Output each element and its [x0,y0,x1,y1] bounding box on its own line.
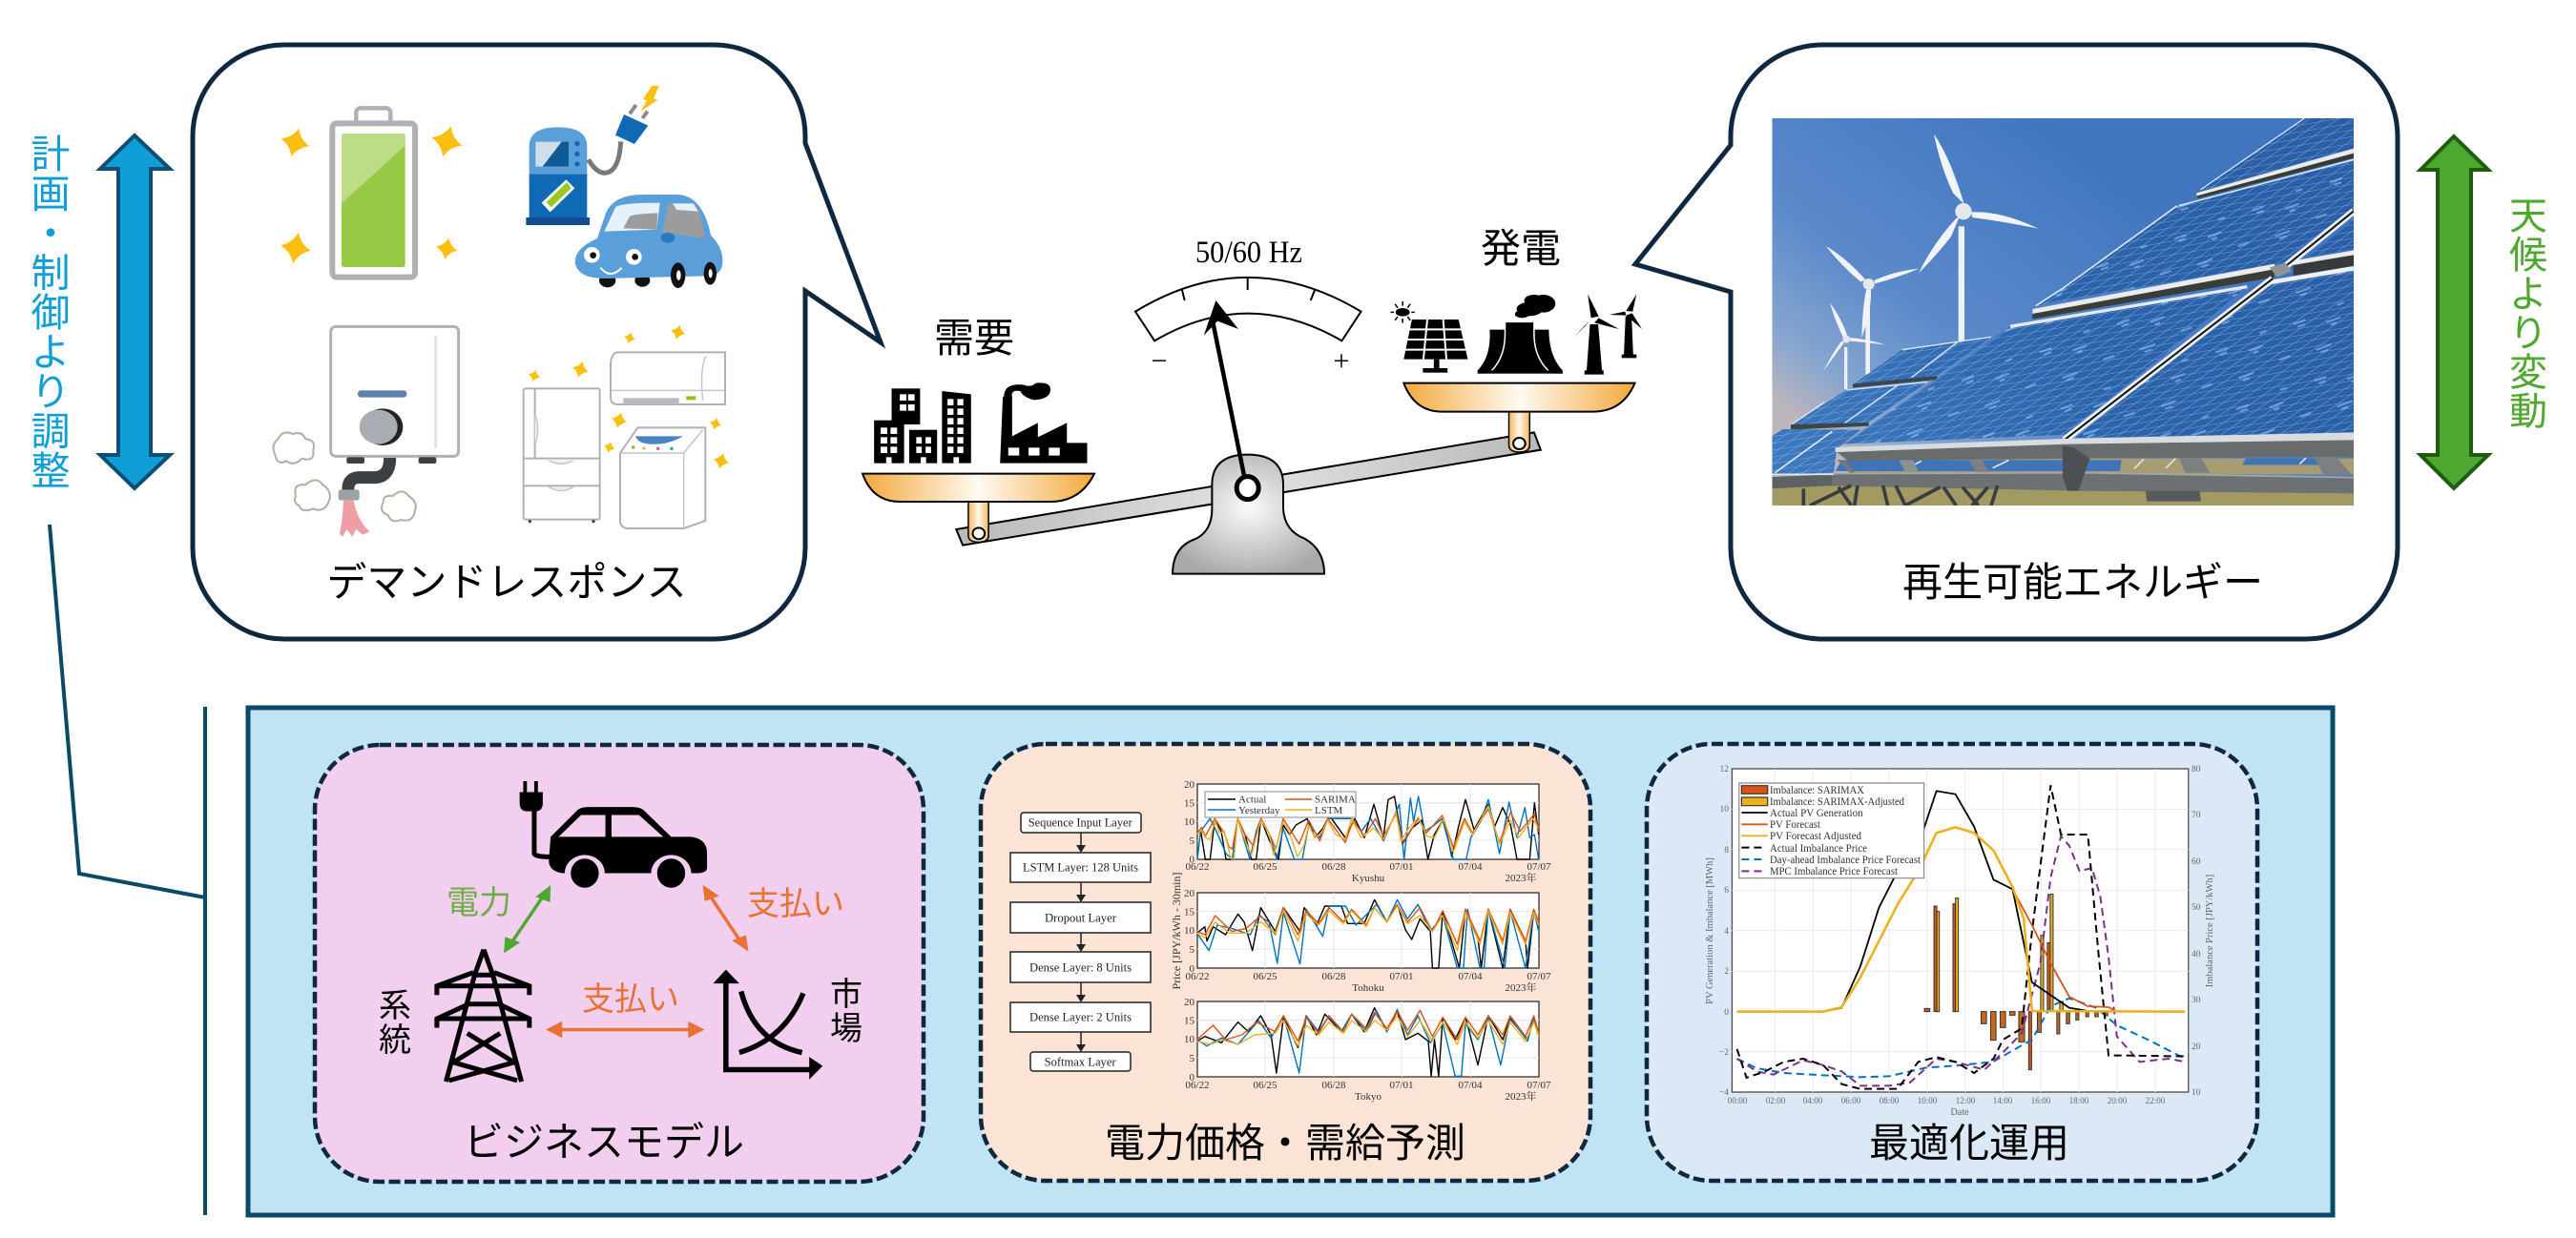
gauge plus sign: + [1334,345,1349,377]
icon: power plant with cooling towers [1478,295,1563,374]
icon: electric car with plug [520,781,707,892]
series: PV forecast adjusted [1737,827,2185,1012]
chart legend box [1739,783,1924,878]
card title: optimal operation: 最適化運用 [1869,1121,2069,1166]
chart axis labels: 00:00 [1728,1096,1748,1105]
chart axis labels: 14:00 [1993,1096,2013,1105]
chart: Kyushu price: 07/01 [1389,861,1414,873]
chart: Kyushu price: 2023年 [1506,871,1536,884]
icon: water heater [273,326,459,537]
chart legend labels: PV Forecast Adjusted [1770,829,1861,842]
chart axis labels: 12:00 [1956,1096,1976,1105]
chart axis labels: 12 [1719,765,1729,774]
icon: EV charging station [526,86,659,225]
label: generation: 発電 [1481,226,1561,271]
chart: Tohoku price: Tohoku [1352,982,1384,994]
icon: battery [278,108,467,278]
chart axis labels: 04:00 [1803,1096,1823,1105]
chart axis labels: 0 [1724,1008,1729,1018]
arrow: payment, grid to market [546,1021,705,1038]
chart: Tohoku price: 06/22 [1185,971,1210,982]
LSTM flowchart: Sequence Input Layer [1028,815,1132,830]
chart axis labels: 06:00 [1841,1096,1861,1105]
balance scale [862,226,1642,574]
gauge needle [1204,300,1246,485]
left pan [862,474,1094,542]
chart axis labels: 60 [2192,857,2201,867]
far panels [1853,337,1991,384]
chart: Kyushu price: 06/28 [1321,861,1346,873]
connector line [50,525,205,1215]
chart: Tohoku price [1170,873,1551,994]
turbines [1844,226,1964,389]
scale beam [956,432,1541,546]
chart axis labels: 8 [1724,846,1729,856]
chart: Kyushu price: 15 [1184,798,1195,810]
icon: transmission tower [437,950,530,1082]
gauge minus sign: − [1152,345,1167,377]
chart: Tohoku price: 10 [1184,925,1195,937]
chart: Kyushu price: Actual [1238,794,1266,805]
chart axis labels: 10:00 [1918,1096,1938,1105]
chart axis labels: 16:00 [2031,1096,2051,1105]
series: MPC price forecast [1737,836,2185,1085]
chart: Kyushu price: Kyushu [1352,873,1385,884]
chart: Tohoku price: 15 [1184,907,1195,918]
chart: Tokyo price: 10 [1184,1034,1195,1045]
scale fulcrum [1173,455,1324,574]
chart: Kyushu price: 07/07 [1527,861,1551,873]
chart axis labels: 70 [2192,811,2201,820]
chart axis labels: PV Generation & Imbalance [MWh] [1705,857,1715,1004]
chart: Tokyo price: 06/25 [1253,1080,1278,1091]
chart axis labels: 10 [1719,805,1729,815]
panel: business model [315,745,924,1182]
chart legend labels: PV Forecast [1770,817,1821,831]
vertical label: weather variability: 天候より変動 [2509,196,2547,433]
series: actual imbalance price [1737,785,2185,1089]
label: payment right: 支払い [747,886,844,922]
chart axis labels: 50 [2192,903,2201,913]
chart: Tokyo price: 07/07 [1527,1080,1551,1091]
chart legend labels: MPC Imbalance Price Forecast [1770,864,1899,877]
chart axis labels: Imbalance Price [JPY/kWh] [2205,875,2215,987]
icon: factory [1000,382,1087,464]
speech bubble: renewable energy [1635,45,2398,639]
chart axis labels [1705,765,2215,1118]
chart: Tokyo price: 07/04 [1458,1080,1483,1091]
chart: Tohoku price: 20 [1184,888,1195,899]
chart: Tohoku price: 2023年 [1506,980,1536,994]
label: renewable energy: 再生可能エネルギー [1902,560,2263,605]
icon: buildings [874,388,971,464]
vertical label: grid: 系統 [379,988,411,1059]
ground and far frames [1772,484,2354,506]
label: demand: 需要 [934,316,1014,361]
chart axis labels: 30 [2192,996,2201,1005]
pivot ring [1236,477,1258,500]
chart axis labels: 4 [1724,927,1729,937]
panel: research topics background [248,708,2333,1215]
card title: price and demand forecast: 電力価格・需給予測 [1105,1121,1465,1166]
gauge ticks [1182,278,1315,300]
LSTM flowchart: Dense Layer: 2 Units [1029,1009,1132,1024]
LSTM flowchart: Dense Layer: 8 Units [1029,959,1132,975]
chart: Tokyo price: 15 [1184,1016,1195,1027]
chart axis labels: Date [1951,1107,1969,1118]
chart: Kyushu price: 5 [1189,836,1195,847]
chart: Tohoku price: 5 [1189,944,1195,956]
arrow: green vertical double arrow [2420,136,2488,488]
chart: Tohoku price: 06/25 [1253,971,1278,982]
gauge frequency label: 50/60 Hz [1195,236,1302,270]
LSTM flowchart: LSTM Layer: 128 Units [1023,860,1138,874]
LSTM flowchart: Dropout Layer [1045,910,1117,925]
label: demand response: デマンドレスポンス [326,560,687,605]
chart: Kyushu price: 10 [1184,816,1195,828]
chart axis labels: 2 [1724,967,1729,977]
imbalance bars [1924,894,2108,1070]
icon group: demand response illustrations [273,86,731,537]
chart: Tohoku price: Price [JPY/kWh - 30min] [1170,873,1183,989]
chart: Kyushu price: Yesterday [1238,805,1280,816]
chart axis labels: 6 [1724,886,1729,896]
chart axis labels: −4 [1719,1088,1729,1098]
chart legend labels: Day-ahead Imbalance Price Forecast [1770,853,1922,866]
chart legend labels [1770,783,1922,877]
chart: Tokyo price: 2023年 [1506,1089,1536,1103]
chart axis labels: 10 [2192,1088,2201,1098]
label: payment bottom: 支払い [582,981,679,1018]
icon: wind turbines [1573,294,1642,375]
big front panels [1843,287,2247,444]
chart: Tokyo price: 06/22 [1185,1080,1210,1091]
chart axis labels: 80 [2192,765,2201,774]
chart: Kyushu price: 06/25 [1253,861,1278,873]
arrow: electricity, car to grid [504,885,551,953]
chart: Tohoku price: 07/07 [1527,971,1551,982]
chart legend labels: Imbalance: SARIMAX [1770,783,1864,796]
chart: Tohoku price: 07/04 [1458,971,1483,982]
chart legend labels: Actual PV Generation [1770,806,1863,819]
panel: optimal operation [1647,744,2257,1181]
panel: price and supply-demand forecasting [981,744,1590,1181]
LSTM flowchart [1010,813,1151,1071]
series: PV forecast [2012,889,2117,1012]
chart legend labels: Imbalance: SARIMAX-Adjusted [1770,794,1904,808]
chart: Kyushu price: 06/22 [1185,861,1210,873]
chart: Tokyo price: 5 [1189,1053,1195,1064]
chart legend labels: Actual Imbalance Price [1770,841,1867,855]
vertical label: market: 市場 [830,977,862,1047]
chart axis labels: 20:00 [2108,1096,2128,1105]
chart axis labels: 20 [2192,1042,2201,1052]
chart: Tohoku price: 0 [1189,963,1195,975]
front rail and beam [1837,440,2354,461]
chart: Tokyo price: 06/28 [1321,1080,1346,1091]
icon: home appliances [524,323,731,528]
chart axis labels: 08:00 [1880,1096,1900,1105]
LSTM flowchart: Softmax Layer [1045,1055,1116,1068]
chart: Kyushu price: 20 [1184,779,1195,791]
chart: Tokyo price [1184,997,1551,1103]
chart: Tokyo price: Tokyo [1355,1091,1381,1103]
chart: Kyushu price: LSTM [1315,805,1343,816]
series: actual PV generation [1737,791,2117,1012]
chart: Tokyo price: 07/01 [1389,1080,1414,1091]
chart axis labels: 02:00 [1766,1096,1786,1105]
icon: smiling electric car [575,195,722,288]
chart: Kyushu price: 07/04 [1458,861,1483,873]
chart: Tokyo price: 0 [1189,1072,1195,1083]
frequency gauge dial [1135,278,1361,340]
photo: solar panels and wind turbines [1772,118,2354,506]
icon: market supply and demand [713,970,822,1080]
chart: Tohoku price: 07/01 [1389,971,1414,982]
chart: PV generation and imbalance [1705,765,2215,1118]
chart axis labels: 22:00 [2146,1096,2166,1105]
chart axis labels: 18:00 [2069,1096,2089,1105]
label: electricity: 電力 [447,885,511,921]
chart: Tohoku price: 06/28 [1321,971,1346,982]
diagonal rail [2065,211,2354,440]
chart: Kyushu price [1184,779,1551,884]
chart: Kyushu price: SARIMA [1315,794,1356,805]
chart: Kyushu price: 0 [1189,855,1195,866]
arrow: blue vertical double arrow [100,135,170,488]
chart axis labels: 40 [2192,950,2201,959]
speech bubble: demand response [193,45,881,639]
series: day-ahead price forecast [1737,999,2185,1077]
chart: Tokyo price: 20 [1184,997,1195,1008]
chart axis labels: −2 [1719,1048,1729,1058]
icon: solar panel [1391,301,1467,373]
right pan [1403,383,1635,452]
vertical label: planning and control: 計画・制御より調整 [31,133,71,493]
arrow: payment, car to market [703,885,748,951]
card title: business model: ビジネスモデル [464,1120,744,1165]
business model diagram icons [437,781,822,1082]
